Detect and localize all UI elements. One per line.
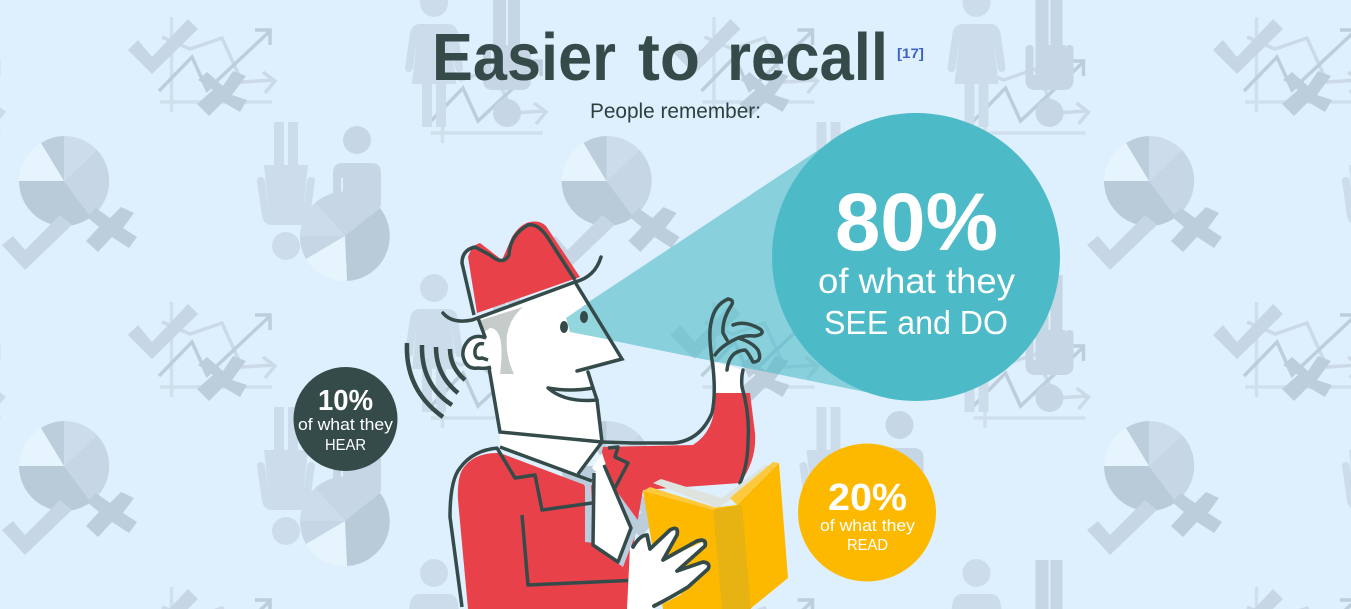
mouth xyxy=(548,388,597,400)
jacket outlines xyxy=(450,442,638,607)
pages xyxy=(653,465,772,508)
title: Easier xyxy=(432,20,616,95)
tie knot xyxy=(592,453,607,471)
sight cone xyxy=(566,137,900,396)
wedge on face xyxy=(566,303,611,340)
face xyxy=(478,282,622,442)
open book xyxy=(643,462,788,609)
title: to xyxy=(638,20,700,95)
eyes xyxy=(560,311,588,333)
man illustration: body xyxy=(450,393,755,609)
subtitle: People remember: xyxy=(590,100,761,123)
hand fill xyxy=(627,528,709,609)
callout: 10% xyxy=(294,367,398,471)
callout: 20%: 20% xyxy=(828,477,907,519)
tie shadow xyxy=(580,467,640,567)
cover xyxy=(643,463,788,609)
citation reference: [17] xyxy=(897,45,924,61)
callout: 10%: of what they xyxy=(298,415,394,434)
callout: 10%: 10% xyxy=(318,385,373,417)
callout: 20% xyxy=(798,444,936,582)
lower hand xyxy=(627,528,709,609)
title: recall xyxy=(727,20,888,95)
cover edges xyxy=(643,462,779,510)
callout: 80%: 80% xyxy=(835,177,998,268)
tie xyxy=(593,465,631,562)
callout: 20%: READ xyxy=(847,537,888,554)
hand outline xyxy=(633,528,709,606)
hat brim xyxy=(443,257,601,321)
callout: 80%: SEE and DO xyxy=(824,304,1008,341)
callout: 10%: HEAR xyxy=(325,437,366,454)
face outline xyxy=(478,282,622,442)
shirt collar xyxy=(500,432,602,474)
jacket xyxy=(458,393,755,609)
hair xyxy=(481,307,523,374)
callout: 80%: of what they xyxy=(818,262,1016,301)
hat fill xyxy=(468,222,580,313)
spine xyxy=(713,505,751,609)
man illustration: head xyxy=(443,222,622,442)
title xyxy=(432,20,888,95)
ear xyxy=(463,336,491,368)
raised arm and hand xyxy=(602,299,762,483)
callout: 20%: of what they xyxy=(820,516,916,535)
hat outline xyxy=(462,225,575,315)
callout: 80% xyxy=(772,113,1060,401)
sound waves xyxy=(407,343,465,417)
